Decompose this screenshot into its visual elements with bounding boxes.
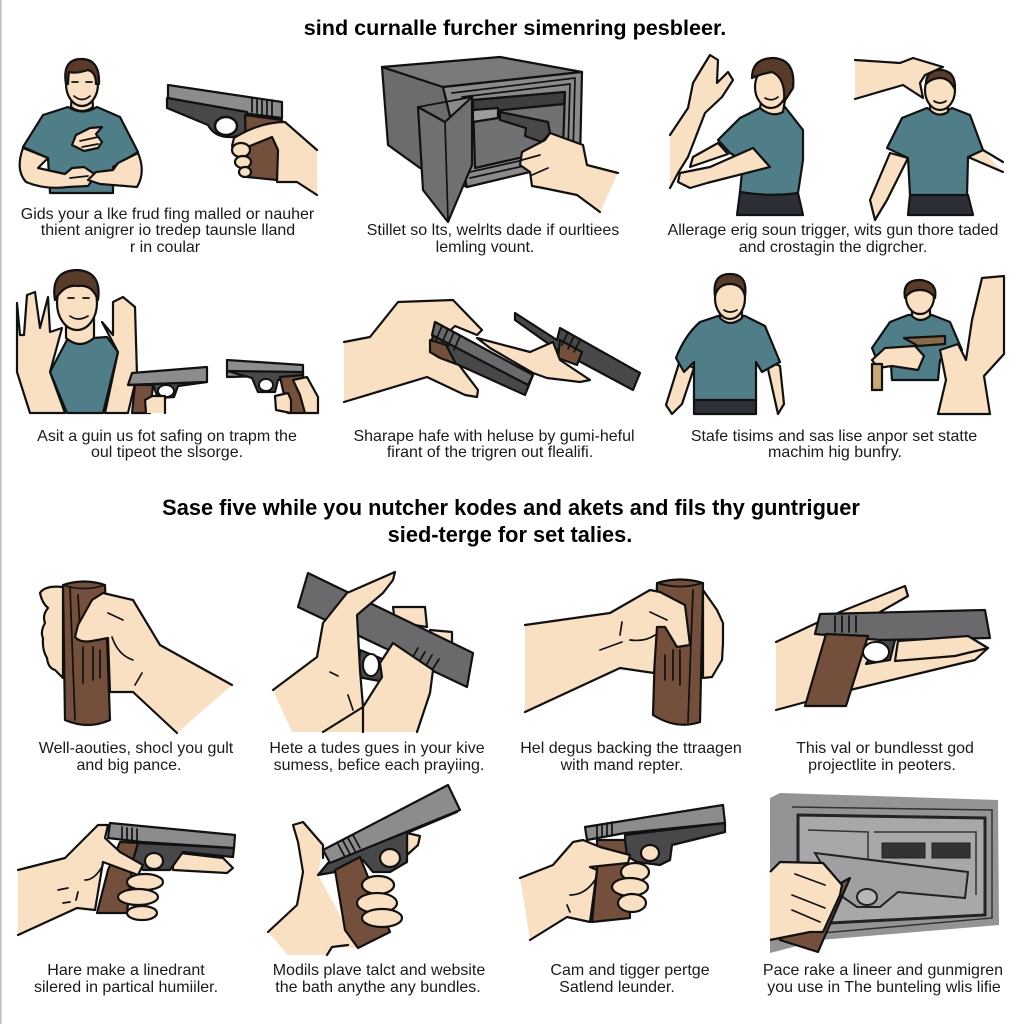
panel: person with hand on head [855, 58, 1003, 220]
panel: grip hold, left [18, 823, 235, 935]
caption: Satlend leunder. [559, 979, 675, 996]
panel: grip hold, thumb up [268, 785, 460, 955]
caption: projectlite in peoters. [808, 757, 956, 774]
panel: person with raised hands and gun [17, 270, 207, 413]
panel: small person with gun and big hand [872, 276, 1004, 414]
title: sind curnalle furcher simenring pesbleer. [304, 15, 726, 40]
panel: gun on open palm [776, 586, 990, 710]
panel: person raising hand [670, 55, 803, 215]
caption: Allerage erig soun trigger, wits gun thore taded [668, 222, 998, 239]
caption: Asit a guin us fot safing on trapm the [37, 428, 297, 445]
caption: machim hig bunfry. [768, 444, 902, 461]
caption: Hare make a linedrant [47, 962, 205, 979]
section heading: sied-terge for set talies. [388, 522, 632, 547]
panel: grip hold, right [520, 805, 725, 940]
caption: lemling vount. [436, 239, 534, 256]
caption: sumess, befice each prayiing. [274, 757, 484, 774]
caption: Pace rake a lineer and gunmigren [763, 962, 1003, 979]
caption: Well-aouties, shocl you gult [39, 740, 234, 757]
caption: and big pance. [77, 757, 181, 774]
section heading: Sase five while you nutcher kodes and akets and fils thy guntriguer [162, 495, 860, 520]
caption: Hete a tudes gues in your kive [269, 740, 485, 757]
caption: the bath anythe any bundles. [275, 979, 481, 996]
caption: with mand repter. [560, 757, 683, 774]
caption: Modils plave talct and website [273, 962, 485, 979]
panel: right-hand gripping wooden cylinder [525, 580, 723, 725]
panel: gun held in hand, pointing left [167, 85, 317, 195]
caption: Sharape hafe with heluse by gumi-heful [353, 428, 635, 445]
panel: standing man [666, 274, 784, 414]
caption: silered in partical humiiler. [34, 979, 218, 996]
caption: Stafe tisims and sas lise anpor set statte [691, 428, 977, 445]
caption: Stillet so lts, welrlts dade if ourltiees [367, 222, 619, 239]
panel: gun in wall safe [770, 793, 999, 953]
panel: gun safe [382, 57, 618, 222]
caption: Cam and tigger pertge [550, 962, 710, 979]
panel: two hands with guns [344, 300, 640, 402]
panel: gun in hand, small [227, 360, 318, 413]
panel: hand gripping wooden cylinder [40, 582, 232, 733]
caption: you use in The bunteling wlis lifie [767, 979, 1001, 996]
caption: oul tipeot the slsorge. [91, 444, 243, 461]
panel: hand gripping slide [273, 572, 473, 732]
caption: thient anigrer io tredep taunsle lland [41, 222, 295, 239]
caption: This val or bundlesst god [796, 740, 974, 757]
caption: and crostagin the digrcher. [739, 239, 927, 256]
caption: Gids your a lke frud fing malled or nauher [21, 206, 315, 223]
caption: Hel degus backing the ttraagen [520, 740, 742, 757]
caption: firant of the trigren out flealifi. [387, 444, 593, 461]
panel: person with hands on chest [20, 59, 142, 193]
caption: r in coular [130, 239, 201, 256]
